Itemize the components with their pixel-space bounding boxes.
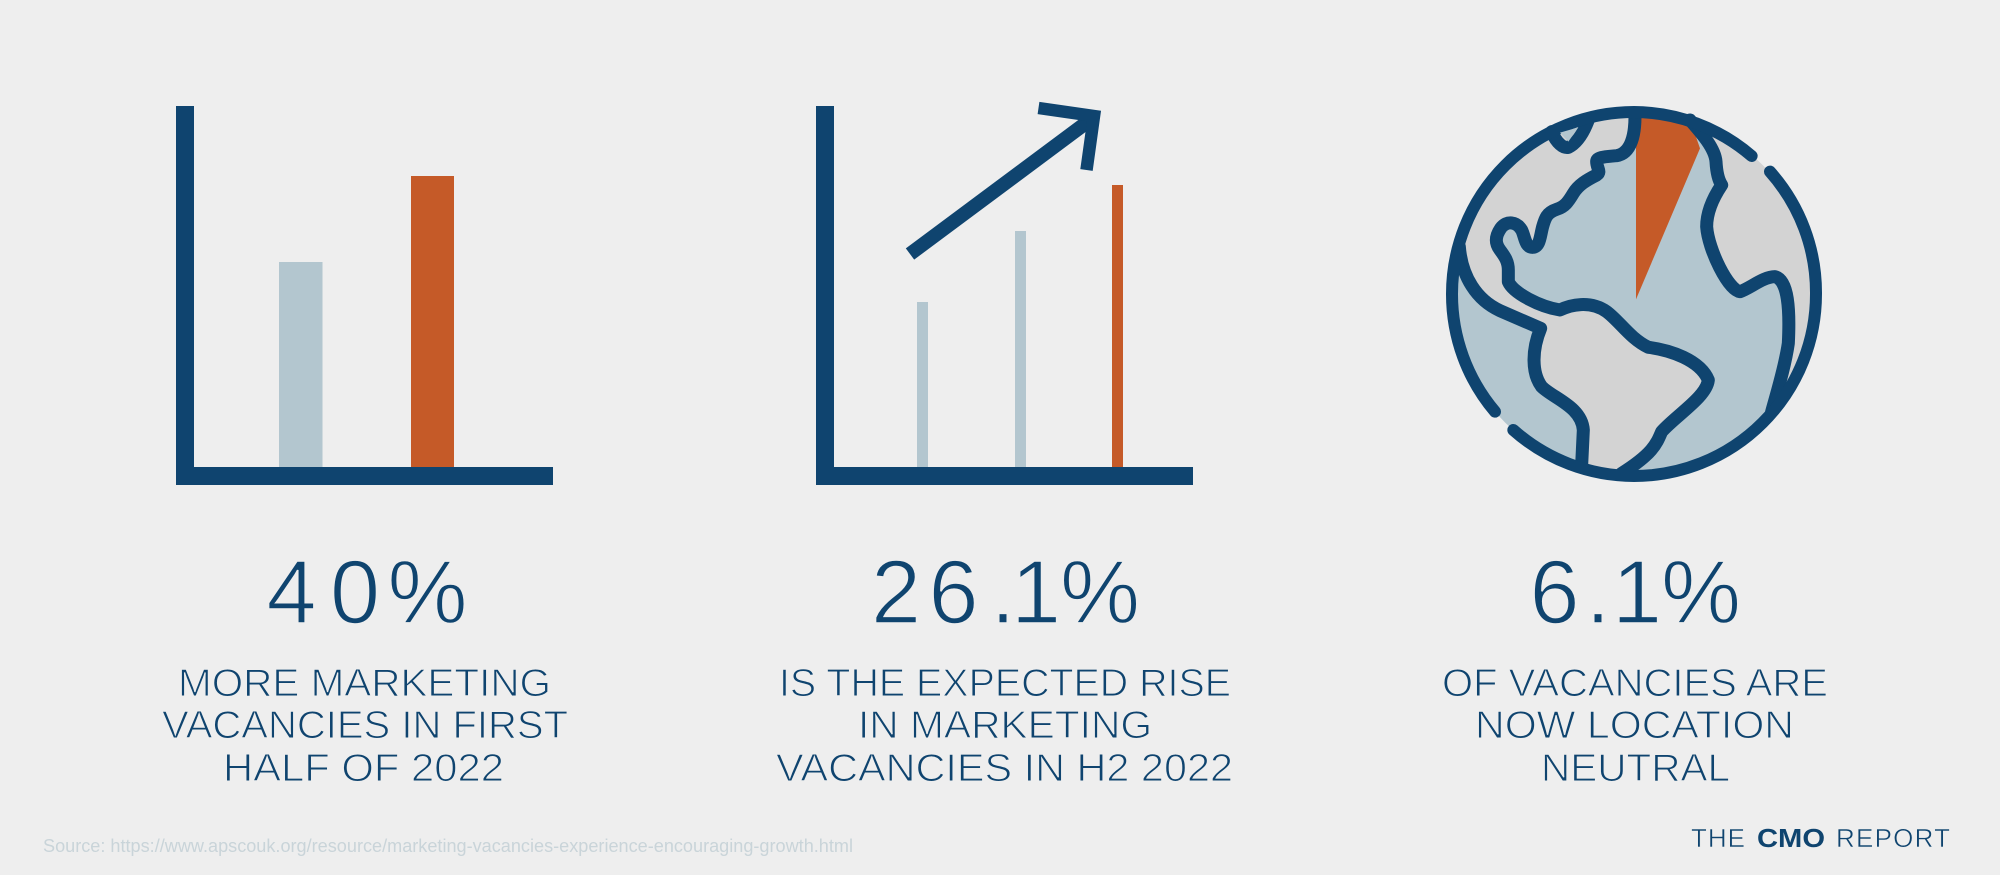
- caption: more marketing vacancies: [162, 662, 568, 790]
- stat column: 40%: [162, 543, 568, 790]
- land masses: [1466, 118, 1810, 469]
- caption: more marketing vacancies: VACANCIES IN FIRST: [162, 704, 568, 747]
- caption: more marketing vacancies: HALF OF 2022: [223, 747, 504, 790]
- stat column: 26.1%: [776, 543, 1233, 790]
- globe coastlines: [1452, 112, 1816, 476]
- arrow rising: [910, 108, 1094, 254]
- chart axes: [176, 106, 553, 485]
- caption: more marketing vacancies: MORE MARKETING: [178, 662, 551, 705]
- chart axes: [816, 106, 1193, 485]
- bar chart with rising arrow: [816, 106, 1193, 485]
- thin bar 2: [1015, 231, 1026, 468]
- thin bar 1: [917, 302, 928, 468]
- caption: expected rise: IS THE EXPECTED RISE: [779, 662, 1231, 705]
- logo: The CMO Report: REPORT: [1836, 823, 1950, 853]
- land: Africa and Europe: [1712, 137, 1810, 380]
- orange wedge: 6.1 percent: [1636, 110, 1700, 299]
- thin bar 3 (orange): [1112, 185, 1123, 468]
- stat column: 6.1%: [1442, 543, 1828, 790]
- caption: location neutral: NOW LOCATION: [1475, 704, 1794, 747]
- caption: expected rise: IN MARKETING: [858, 704, 1152, 747]
- logo: The CMO Report: [1691, 823, 1950, 853]
- caption: expected rise: VACANCIES IN H2 2022: [776, 747, 1233, 790]
- source note: Source: https://www.apscouk.org/resource/marketing-vacancies-experience-encouraging-growth.html: [43, 836, 853, 856]
- caption: expected rise: [776, 662, 1233, 790]
- land: Americas: [1466, 118, 1702, 469]
- number: 6.1%: 6.1%: [1530, 543, 1741, 643]
- number: 26.1%: 26.1%: [871, 543, 1140, 643]
- bar: 2022 value (orange): [411, 176, 454, 468]
- caption: location neutral: OF VACANCIES ARE: [1442, 662, 1828, 705]
- logo: The CMO Report: CMO: [1757, 823, 1825, 853]
- bar chart: 40 percent more vacancies: [176, 106, 553, 485]
- number: 40%: 40%: [266, 543, 468, 643]
- logo: The CMO Report: THE: [1691, 823, 1745, 853]
- icon: globe with orange wedge: [1446, 106, 1822, 482]
- bar: first half baseline (light blue): [279, 262, 322, 468]
- caption: location neutral: NEUTRAL: [1541, 747, 1730, 790]
- small lake: [1560, 127, 1578, 142]
- caption: location neutral: [1442, 662, 1828, 790]
- globe ocean: [1452, 112, 1816, 476]
